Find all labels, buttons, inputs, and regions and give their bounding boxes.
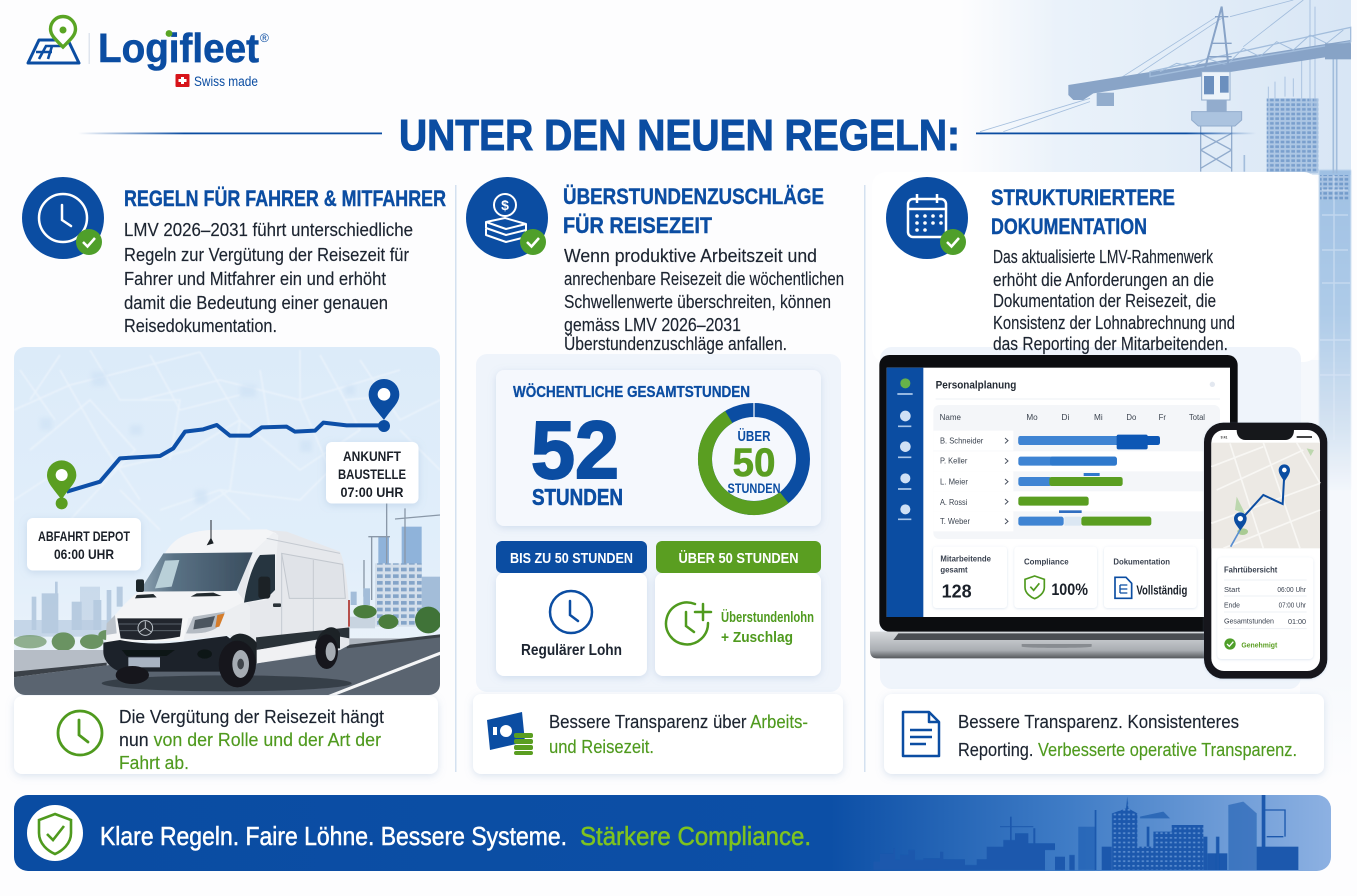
sidebar: [887, 368, 923, 617]
trip summary card: Fahrtübersicht: [1224, 566, 1278, 575]
swiss made text: Swiss made: [194, 74, 258, 89]
body text: gemäss LMV 2026–2031: [564, 315, 741, 335]
schedule table: Mo: [1026, 412, 1038, 422]
body text: Regeln zur Vergütung der Reisezeit für: [124, 245, 409, 265]
panel: column 1 rules for drivers: [22, 177, 446, 336]
note text: [549, 712, 808, 757]
schedule table: P. Keller: [940, 456, 968, 466]
illustration: route map and van: [13, 347, 442, 695]
label: arrival construction site: BAUSTELLE: [338, 466, 406, 482]
road: [13, 634, 440, 695]
icon: calendar with check: [886, 177, 968, 259]
icon: green start pin: [47, 460, 76, 509]
heading: REGELN FÜR FAHRER & MITFAHRER: [124, 186, 446, 211]
icon: money stacks with check: [466, 177, 548, 259]
body text: Das aktualisierte LMV-Rahmenwerk: [993, 247, 1214, 267]
note text: [958, 712, 1297, 760]
left skyline: [14, 582, 123, 637]
note text: nun von der Rolle und der Art der: [119, 730, 381, 750]
stat card: compliance: [1014, 547, 1097, 608]
stat card: compliance: 100%: [1051, 580, 1088, 599]
trip summary card: Start: [1224, 587, 1240, 594]
card: up to 50 hours: BIS ZU 50 STUNDEN: [510, 550, 633, 567]
note text: [119, 707, 384, 773]
registered mark: ®: [260, 31, 269, 45]
icon: green clock: [58, 711, 102, 755]
trip summary card: [1217, 557, 1313, 659]
footer highlight: Stärkere Compliance.: [580, 821, 811, 851]
stat card: documentation: Vollständig: [1136, 583, 1187, 597]
background: construction crane scene: [960, 0, 1351, 780]
donut chart: over 50 hours: ÜBER: [738, 428, 771, 445]
schedule table: B. Schneider: [940, 435, 984, 445]
panel: weekly hours dashboard: [476, 354, 841, 692]
stat card: employees: gesamt: [940, 565, 968, 575]
card: weekly total hours: STUNDEN: [532, 484, 623, 510]
logo: Logifleet: [28, 16, 269, 89]
icon: blue destination pin: [369, 379, 399, 432]
panel: devices backdrop: [880, 347, 1301, 689]
icon: document: [903, 712, 939, 756]
phone map: [1211, 443, 1320, 548]
label: arrival construction site: 07:00 UHR: [340, 484, 404, 500]
card: weekly total hours: [496, 370, 821, 526]
schedule table: T. Weber: [940, 516, 970, 526]
laptop: personnel planning: [870, 355, 1247, 658]
trip summary card: 06:00 Uhr: [1277, 587, 1307, 594]
divider: column 2 and 3: [864, 185, 866, 772]
body text: Fahrer und Mitfahrer ein und erhöht: [124, 269, 386, 289]
label: departure depot: ABFAHRT DEPOT: [38, 528, 130, 544]
heading: STRUKTURIERTERE: [991, 185, 1175, 210]
body text: das Reporting der Mitarbeitenden.: [993, 334, 1228, 354]
note text: Die Vergütung der Reisezeit hängt: [119, 707, 384, 727]
title: UNTER DEN NEUEN REGELN:: [399, 111, 960, 160]
body text: [564, 246, 844, 354]
trees: [14, 630, 106, 650]
schedule table: Name: [940, 412, 961, 422]
body text: [993, 247, 1235, 354]
laptop and phone mockup: [870, 355, 1327, 679]
van: [102, 520, 352, 691]
body text: Dokumentation der Reisezeit, die: [993, 291, 1216, 311]
heading: [563, 184, 824, 238]
note text: und Reisezeit.: [549, 737, 654, 757]
label: arrival construction site: [326, 442, 418, 504]
label: arrival construction site: ANKUNFT: [343, 448, 401, 464]
trip summary card: 07:00 Uhr: [1279, 602, 1307, 609]
footer skyline: [920, 795, 1299, 870]
note text: Fahrt ab.: [119, 753, 189, 773]
card: up to 50 hours: [496, 541, 647, 676]
phone: trip overview: 9:41: [1221, 435, 1227, 439]
heading: DOKUMENTATION: [991, 214, 1147, 239]
card: over 50 hours: [655, 541, 821, 676]
card: over 50 hours: ÜBER 50 STUNDEN: [678, 550, 798, 567]
icon: money and coins: [487, 712, 533, 755]
icon: blue clock: [550, 591, 592, 633]
schedule table: L. Meier: [940, 476, 968, 486]
body text: [124, 220, 413, 336]
donut chart: over 50 hours: 50: [732, 441, 776, 485]
label: departure depot: 06:00 UHR: [54, 546, 114, 562]
body text: erhöht die Anforderungen an die: [993, 270, 1214, 290]
body text: Überstundenzuschläge anfallen.: [564, 334, 787, 354]
icon: map with pin: [28, 16, 79, 63]
stat card: compliance: Compliance: [1024, 557, 1069, 567]
icon: swiss flag: [176, 74, 190, 87]
label: departure depot: [27, 518, 141, 570]
route line: [67, 423, 383, 492]
card: up to 50 hours: Regulärer Lohn: [521, 642, 622, 659]
card: weekly total hours: WÖCHENTLICHE GESAMTSTUNDEN: [513, 382, 750, 401]
trip summary card: Gesamtstunden: [1224, 618, 1274, 625]
map streets: [14, 350, 440, 530]
body text: anrechenbare Reisezeit die wöchentlichen: [564, 269, 844, 289]
donut chart: over 50 hours: [705, 402, 803, 508]
trip summary card: Genehmigt: [1241, 640, 1278, 649]
panel: column 3 background: [872, 172, 1318, 362]
note text: Reporting. Verbesserte operative Transparenz.: [958, 740, 1297, 760]
panel: column 3 structured documentation: [886, 177, 1235, 354]
logo wordmark: Logifleet: [98, 25, 259, 71]
callout: column 3 note: [884, 694, 1324, 774]
footer slogan: Klare Regeln. Faire Löhne. Bessere Systeme.: [100, 821, 567, 851]
callout: column 1 note: [14, 696, 438, 774]
trip summary card: 01:00: [1288, 619, 1306, 626]
donut chart: over 50 hours: STUNDEN: [728, 480, 780, 496]
body text: LMV 2026–2031 führt unterschiedliche: [124, 220, 413, 240]
icon: money stacks with check: $: [501, 197, 509, 213]
stat card: employees: [933, 547, 1007, 608]
divider: column 1 and 2: [455, 185, 456, 772]
body text: Konsistenz der Lohnabrechnung und: [993, 313, 1235, 333]
stat card: employees: 128: [942, 580, 972, 601]
icon: clock with check: [22, 177, 104, 259]
heading: ÜBERSTUNDENZUSCHLÄGE: [563, 184, 824, 209]
card: weekly total hours: 52: [531, 405, 619, 496]
icon: clock plus: [666, 602, 711, 644]
schedule table: Do: [1126, 412, 1137, 422]
schedule table: [933, 405, 1220, 539]
icon: shield check: [27, 805, 83, 861]
schedule table: Total: [1189, 412, 1205, 422]
card: over 50 hours: Überstundenlohn: [721, 609, 814, 626]
panel: column 2 overtime supplements: [466, 177, 844, 354]
schedule table: Fr: [1159, 412, 1166, 422]
callout: column 2 note: [473, 694, 843, 774]
screen heading: Personalplanung: [936, 380, 1016, 392]
body text: Schwellenwerte überschreiten, können: [564, 292, 831, 312]
note text: Bessere Transparenz. Konsistenteres: [958, 712, 1239, 732]
body text: damit die Bedeutung einer genauen: [124, 293, 388, 313]
trip summary card: Ende: [1224, 602, 1240, 609]
phone: trip overview: [1204, 423, 1327, 679]
body text: Wenn produktive Arbeitszeit und: [564, 246, 817, 266]
schedule table: A. Rossi: [940, 497, 967, 507]
stat card: documentation: Dokumentation: [1113, 557, 1170, 567]
heading: [991, 185, 1175, 239]
body text: Reisedokumentation.: [124, 316, 277, 336]
right skyline and construction: [350, 503, 442, 633]
schedule table: Mi: [1094, 412, 1103, 422]
footer banner: [14, 795, 1331, 871]
card: over 50 hours: + Zuschlag: [721, 629, 793, 646]
note text: Bessere Transparenz über Arbeits-: [549, 712, 808, 732]
schedule table: Di: [1061, 412, 1069, 422]
stat card: documentation: [1104, 547, 1197, 608]
stat card: employees: Mitarbeitende: [940, 553, 991, 563]
heading: FÜR REISEZEIT: [563, 213, 713, 238]
